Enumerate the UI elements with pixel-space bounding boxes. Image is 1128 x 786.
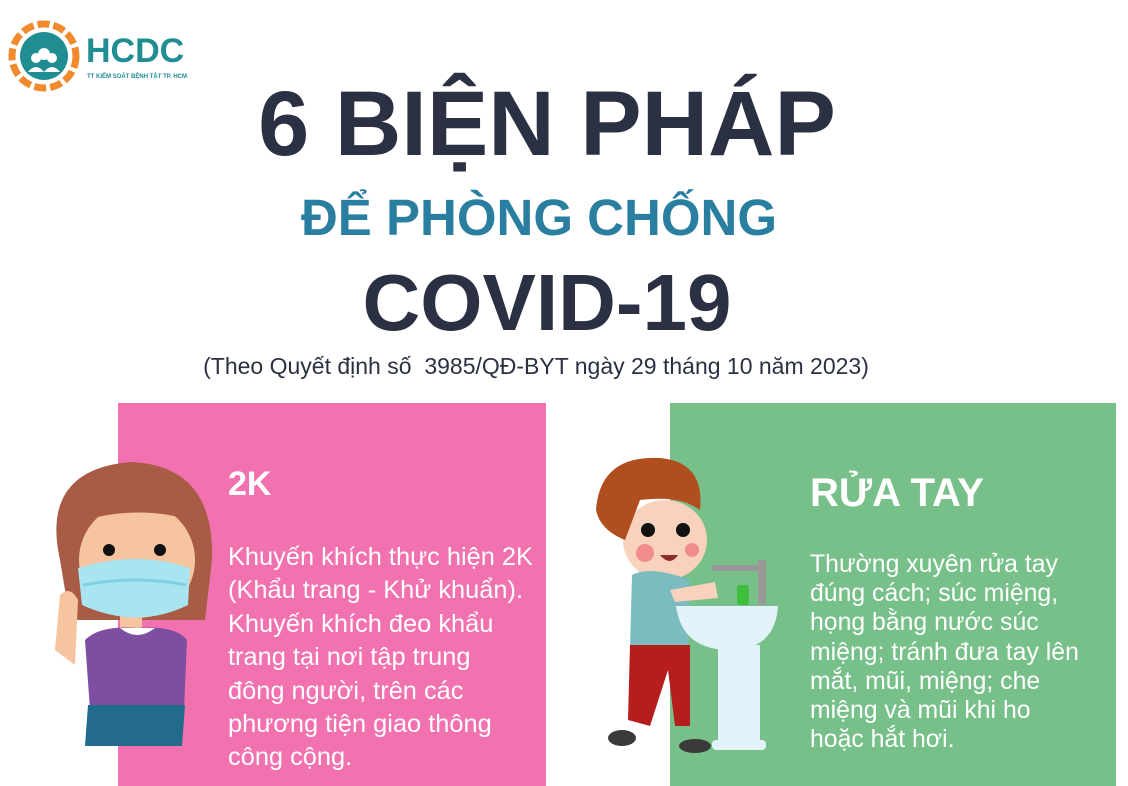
text 2K: (Khẩu trang - Khử khuẩn).: [228, 576, 523, 604]
illustration: boy washing hands: [596, 458, 778, 753]
text rửa tay: đúng cách; súc miệng,: [810, 580, 1058, 607]
text 2K: đông người, trên các: [228, 677, 464, 705]
title: 6 BIỆN PHÁP: [258, 73, 836, 175]
panel: rửa tay: [670, 403, 1116, 786]
text 2K: Khuyến khích đeo khẩu: [228, 610, 493, 638]
text rửa tay: miệng và mũi khi ho: [810, 697, 1031, 724]
illustration: girl with mask: [55, 462, 212, 746]
text rửa tay: họng bằng nước súc: [810, 609, 1039, 636]
heading COVID-19: COVID-19: [362, 258, 731, 347]
logo: [8, 20, 187, 92]
logo: TT KIỂM SOÁT BỆNH TẬT TP. HCM: [87, 72, 187, 80]
text 2K: Khuyến khích thực hiện 2K: [228, 543, 533, 571]
text rửa tay: miệng; tránh đưa tay lên: [810, 639, 1079, 666]
text rửa tay: mắt, mũi, miệng; che: [810, 668, 1040, 695]
panel: 2K: [118, 403, 546, 786]
text rửa tay: hoặc hắt hơi.: [810, 726, 954, 753]
subtitle: để phòng chống: ĐỂ PHÒNG CHỐNG: [301, 189, 777, 246]
logo: HCDC: [86, 32, 184, 70]
text 2K: phương tiện giao thông: [228, 710, 492, 738]
text rửa tay: [810, 551, 1079, 753]
source note: (Theo Quyết định số 3985/QĐ-BYT ngày 29 tháng 10 năm 2023): [203, 353, 869, 379]
heading rửa tay: RỬA TAY: [810, 471, 984, 515]
text 2K: trang tại nơi tập trung: [228, 643, 470, 671]
text 2K: [228, 543, 533, 771]
text rửa tay: Thường xuyên rửa tay: [810, 551, 1058, 578]
heading 2K: 2K: [228, 465, 271, 503]
text 2K: công cộng.: [228, 743, 352, 771]
